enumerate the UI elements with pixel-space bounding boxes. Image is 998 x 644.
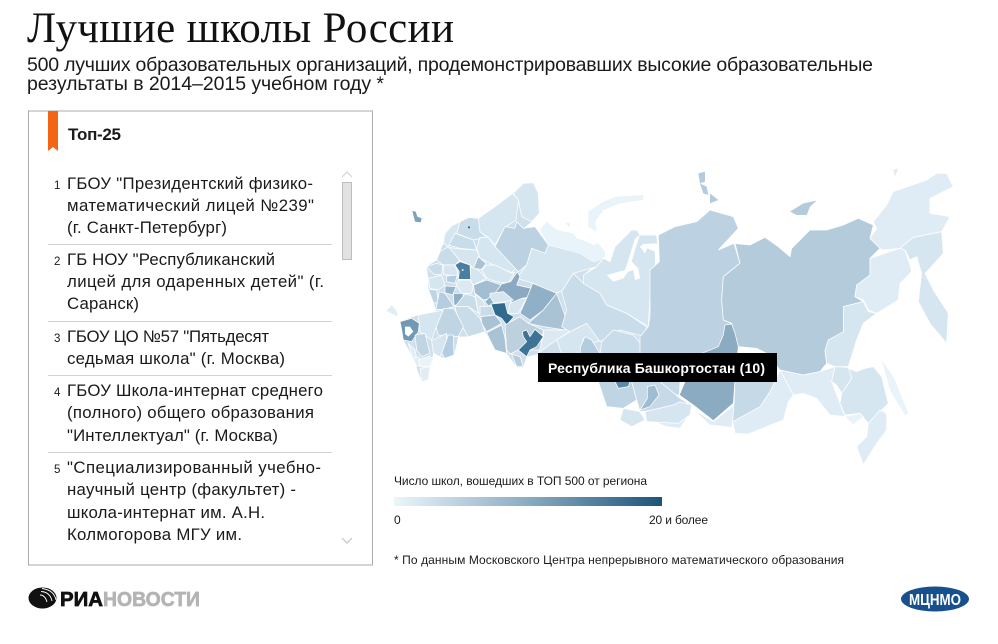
eastern regions (637, 168, 953, 465)
list item 5: научный центр (факультет) - (67, 480, 296, 499)
list item 3 (54, 327, 285, 368)
legend: 20 и более (649, 513, 708, 527)
region: Moscow oblast (455, 262, 471, 279)
list item 1: математический лицей №239" (67, 196, 314, 215)
south siberian regions (580, 337, 692, 427)
region: Irkutsk (679, 324, 738, 421)
logo: RIA Novosti: РИА (60, 589, 103, 611)
arctic coast: Nenets, Novaya Zemlya, Yamal (540, 195, 662, 327)
region: Bashkortostan (518, 329, 543, 357)
list item 5: школа-интернат им. А.Н. (67, 503, 265, 522)
list item 3: ГБОУ ЦО №57 "Пятьдесят (67, 327, 269, 346)
list item 5: 5 (54, 464, 60, 476)
list item 4: "Интеллектуал" (г. Москва) (67, 426, 278, 445)
title: Лучшие школы России (27, 5, 454, 52)
list item 5: "Специализированный учебно- (67, 458, 321, 477)
footnote: * По данным Московского Центра непрерывного математического образования (394, 553, 844, 567)
legend (394, 474, 708, 527)
region: Yakutia (722, 218, 880, 375)
list item 4 (54, 381, 323, 445)
logo: MCNMO (901, 586, 969, 612)
panel heading: Топ-25 (68, 125, 121, 144)
list item 1 (54, 174, 314, 237)
scrollbar (342, 172, 352, 543)
list item 1: 1 (54, 180, 60, 192)
list item 1: ГБОУ "Президентский физико- (67, 174, 313, 193)
european regions (386, 183, 650, 382)
list item 3: 3 (54, 333, 60, 345)
list item 2: Саранск) (67, 294, 139, 313)
subtitle: 500 лучших образовательных организаций, продемонстрировавших высокие образовательные (27, 54, 873, 76)
icon: orange ribbon (48, 111, 58, 151)
list item 3: седьмая школа" (г. Москва) (67, 349, 285, 368)
list item 5 (54, 458, 321, 544)
subtitle: результаты в 2014–2015 учебном году * (27, 73, 384, 95)
list item 4: ГБОУ Школа-интернат среднего (67, 381, 323, 400)
list item 2: 2 (54, 256, 60, 268)
legend: Число школ, вошедших в ТОП 500 от региона (394, 474, 647, 488)
tooltip: Bashkortostan: Республика Башкортостан (10) (548, 360, 765, 376)
list item 2 (54, 250, 324, 313)
tooltip: Bashkortostan (538, 353, 777, 382)
logo: RIA Novosti (28, 588, 200, 611)
subtitle (27, 54, 873, 95)
region: Krasnoyarsk (640, 210, 740, 360)
list item 1: (г. Санкт-Петербург) (67, 218, 227, 237)
list item 2: лицей для одаренных детей" (г. (67, 272, 324, 291)
logo: RIA Novosti: НОВОСТИ (103, 589, 200, 611)
list item 2: ГБ НОУ "Республиканский (67, 250, 275, 269)
panel: top-25 list (28, 111, 372, 565)
list item 4: (полного) общего образования (67, 403, 314, 422)
choropleth map of Russia (386, 168, 953, 465)
list item 5: Колмогорова МГУ им. (67, 525, 242, 544)
list item 4: 4 (54, 387, 61, 399)
logo: MCNMO: МЦНМО (909, 592, 961, 609)
legend: 0 (394, 513, 401, 527)
